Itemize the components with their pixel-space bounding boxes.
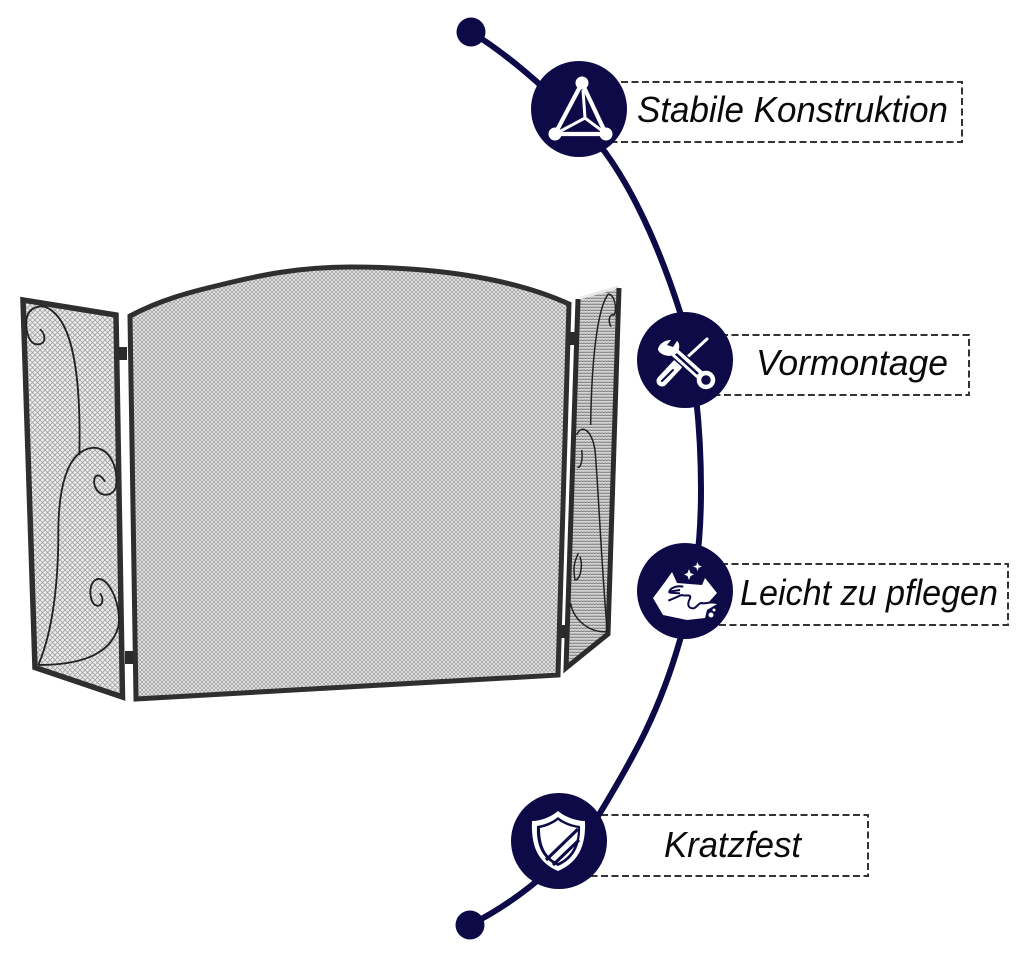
screwdriver	[662, 339, 707, 381]
shield inner ring	[537, 817, 580, 866]
center panel	[130, 267, 569, 699]
triangle icon disc	[531, 61, 627, 157]
bubbles	[708, 608, 716, 618]
icon: triangle structure	[531, 61, 627, 157]
label box: Stabile Konstruktion	[600, 82, 962, 142]
bottom end dot	[456, 910, 484, 940]
left panel frame bars	[23, 300, 122, 697]
cleaning icon disc	[637, 543, 733, 639]
right panel light top edge	[580, 287, 618, 298]
wrench	[658, 340, 713, 387]
center panel frame	[130, 267, 569, 699]
curved connector line	[470, 32, 701, 925]
right panel mesh	[566, 288, 620, 668]
text: Kratzfest: Kratzfest	[664, 824, 803, 865]
left panel scrollwork	[26, 306, 119, 665]
right side panel	[566, 287, 620, 668]
shield stripes	[546, 829, 579, 865]
cloth	[653, 572, 717, 620]
label box: Kratzfest	[580, 815, 868, 876]
icon: shield	[511, 793, 607, 889]
tools icon disc	[637, 312, 733, 408]
text: Leicht zu pflegen: Leicht zu pflegen	[740, 572, 998, 613]
label box: Vormontage	[700, 335, 969, 395]
fireplace screen product	[23, 267, 620, 699]
shield centre	[540, 820, 578, 863]
left hinges	[119, 347, 133, 664]
right panel scrollwork	[571, 294, 615, 632]
left side panel	[23, 300, 122, 697]
shield icon disc	[511, 793, 607, 889]
left panel mesh	[25, 302, 121, 695]
triangle icon outer lines	[555, 83, 606, 134]
label box: Leicht zu pflegen	[700, 564, 1008, 625]
right panel frame bars	[566, 288, 619, 668]
top end dot	[456, 18, 486, 46]
shield outline	[532, 811, 585, 871]
text: Stabile Konstruktion: Stabile Konstruktion	[637, 89, 948, 130]
icon: wrench and screwdriver	[637, 312, 733, 408]
hand outline	[668, 586, 717, 608]
triangle icon inner lines	[557, 90, 605, 133]
sparkles	[684, 562, 702, 580]
center panel mesh	[130, 269, 569, 699]
text: Vormontage: Vormontage	[756, 342, 948, 383]
icon: cleaning cloth and hand	[637, 543, 733, 639]
right hinges	[559, 332, 579, 638]
triangle icon nodes	[548, 76, 612, 140]
